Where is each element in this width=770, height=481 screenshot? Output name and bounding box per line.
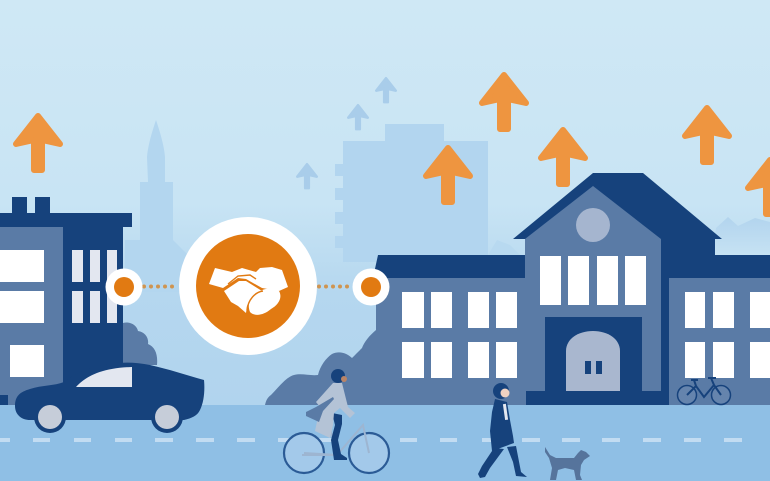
arrow 6 [748,160,770,214]
school building [373,173,770,405]
faint background arrows [297,78,396,188]
head [331,369,345,383]
road [0,405,770,481]
handshake badge [179,217,317,355]
coat [315,383,355,438]
parked bicycle [678,378,730,404]
icon: handshake [209,267,288,315]
central gable [525,186,661,405]
pedestrian [478,383,527,478]
bicycle [284,425,389,473]
left bush [123,323,157,365]
orange growth arrows [16,75,770,214]
right bush behind school [265,330,376,405]
left apartment building [0,197,132,405]
left connector node [106,268,142,306]
small arrow 2 [348,105,368,129]
coat [490,399,514,451]
cyclist [284,369,389,473]
arrow 4 [541,130,585,184]
bag [306,397,334,422]
arrow 3 [482,75,526,129]
small arrow 3 [376,78,396,102]
arrow 5 [685,108,729,162]
right wing [669,278,770,405]
background skyline [125,120,770,292]
arrow 1 [16,116,60,170]
windows [402,256,770,378]
right connector node [352,268,390,306]
distant hills [712,217,770,255]
gable round window [576,208,610,242]
connector dots [142,284,349,288]
small arrow 1 [297,164,317,188]
left wing [376,270,526,405]
spire tower [125,120,190,292]
arrow 2 [426,148,470,202]
arched door [566,331,620,391]
entrance [545,317,642,392]
legs [478,446,527,478]
rear leg [331,413,347,460]
dog [545,447,590,480]
head [493,383,509,399]
office block [335,124,488,262]
main roof [513,173,770,405]
car [15,363,204,433]
